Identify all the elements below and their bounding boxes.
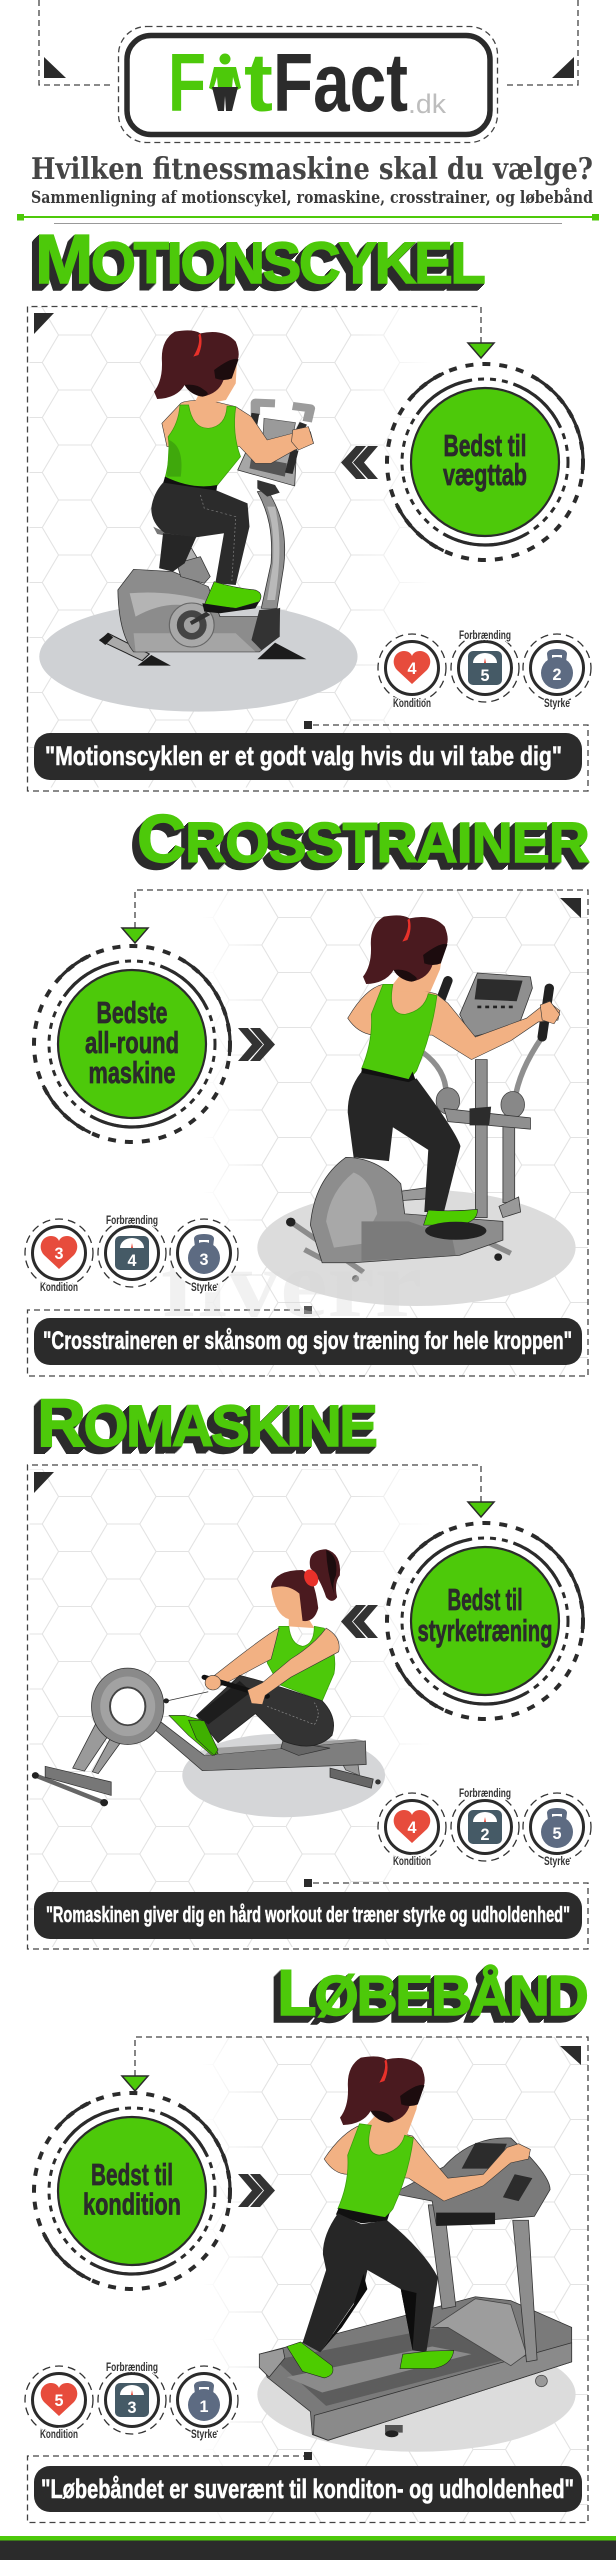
panel frame — [28, 2037, 588, 2522]
quote — [34, 2466, 582, 2512]
badge: best for: Bedst til — [444, 428, 526, 463]
stat: forbrænding — [98, 2360, 166, 2434]
heading: CROSSTRAINER — [137, 801, 589, 877]
corner arrow — [34, 1472, 54, 1493]
quote — [34, 1318, 582, 1365]
arrow to badge — [122, 928, 148, 943]
hex background — [30, 1466, 431, 1948]
logo — [118, 26, 498, 142]
logo: .dk — [408, 89, 447, 119]
stat: forbrænding: Forbrænding — [459, 1786, 511, 1800]
stat: kondition — [378, 1793, 446, 1868]
section: romaskine — [28, 1385, 591, 1949]
badge: best for: Bedst til — [448, 1582, 522, 1617]
logo: F — [168, 36, 206, 129]
stat: forbrænding: 4 — [128, 1251, 137, 1270]
illustration: woman on rowing machine — [32, 1549, 385, 1817]
hex background — [30, 307, 431, 792]
badge: best for: vægttab — [443, 457, 527, 492]
hex background — [203, 890, 588, 1376]
corner arrow — [560, 2046, 581, 2065]
stat: forbrænding: 2 — [480, 1825, 490, 1844]
corner arrow right — [552, 57, 574, 78]
panel frame — [28, 306, 588, 791]
watermark: fiverr — [162, 1230, 422, 1337]
stat: styrke: Styrke — [544, 1854, 570, 1868]
illustration: woman on treadmill — [257, 2071, 576, 2452]
stat: kondition: 5 — [54, 2391, 64, 2410]
stat: kondition: Kondition — [40, 1280, 78, 1294]
corner arrow — [560, 898, 581, 918]
stat: forbrænding: 3 — [128, 2398, 136, 2417]
corner arrow left — [44, 57, 66, 78]
stat: styrke — [523, 1793, 591, 1868]
logo: Fact — [273, 36, 408, 129]
arrow to badge — [468, 1502, 494, 1517]
icon: person in logo — [209, 54, 241, 111]
panel frame — [28, 1465, 588, 1949]
hair — [154, 330, 239, 399]
stat: styrke: 2 — [552, 665, 562, 684]
stat: kondition: Kondition — [40, 2427, 78, 2441]
stat: forbrænding — [451, 1786, 519, 1861]
stat: styrke — [170, 1219, 238, 1294]
stat: kondition: 4 — [408, 659, 417, 678]
stat: kondition: Kondition — [393, 696, 431, 710]
heading: ROMASKINE — [37, 1385, 376, 1461]
hair — [340, 2056, 425, 2125]
stat: forbrænding — [98, 1213, 166, 1287]
hex background — [203, 2037, 588, 2522]
illustration: woman on crosstrainer — [257, 932, 576, 1306]
badge: best for — [387, 1523, 583, 1719]
badge: best for — [387, 364, 583, 560]
illustration: woman on exercise bike — [39, 347, 358, 712]
logo: t — [244, 36, 273, 129]
stat: styrke: 5 — [552, 1824, 562, 1843]
hair — [363, 915, 448, 984]
badge: best for: all-round — [85, 1025, 179, 1060]
arrow to badge — [468, 343, 494, 358]
stat: styrke — [170, 2366, 238, 2441]
stat: forbrænding: Forbrænding — [106, 2360, 158, 2374]
badge: best for: Bedste — [96, 995, 168, 1030]
stat: forbrænding: Forbrænding — [106, 1213, 158, 1227]
corner arrow — [34, 313, 54, 334]
quote — [34, 733, 582, 780]
heading: MOTIONSCYKEL — [35, 220, 484, 298]
stat: styrke: 3 — [200, 1250, 208, 1269]
stat: styrke — [523, 634, 591, 710]
square marker — [304, 721, 312, 729]
badge: best for — [34, 2093, 230, 2289]
stat: kondition — [378, 634, 446, 710]
section: crosstrainer — [25, 801, 589, 1376]
header frame — [39, 0, 578, 85]
footer bar — [0, 2536, 616, 2560]
arrow to badge — [122, 2076, 148, 2091]
section: løbebånd — [25, 1956, 588, 2522]
stat: styrke: 1 — [200, 2397, 208, 2416]
stat: kondition: 3 — [54, 1244, 64, 1263]
square marker — [304, 1306, 312, 1314]
badge: best for: Bedst til — [91, 2157, 173, 2192]
chevrons — [238, 1028, 275, 1061]
badge: best for: maskine — [88, 1055, 176, 1090]
stat: kondition: Kondition — [393, 1854, 431, 1868]
stat: forbrænding: Forbrænding — [459, 628, 511, 642]
chevrons — [341, 446, 378, 479]
badge: best for: kondition — [83, 2186, 181, 2222]
quote — [34, 1892, 582, 1939]
badge: best for — [34, 946, 230, 1142]
chevrons — [238, 2174, 275, 2207]
stat: forbrænding: 5 — [480, 666, 490, 685]
panel frame — [28, 890, 588, 1376]
stat: forbrænding — [451, 628, 519, 702]
stat: styrke: Styrke — [544, 696, 570, 710]
heading: LØBEBÅND — [277, 1956, 587, 2029]
section: motionscykel — [28, 220, 591, 792]
stat: kondition: 4 — [408, 1818, 417, 1837]
stat: kondition — [25, 1219, 93, 1294]
square marker — [304, 2452, 312, 2460]
square marker — [304, 1879, 312, 1887]
divider lines — [17, 214, 599, 224]
stat: kondition — [25, 2366, 93, 2441]
chevrons — [341, 1605, 378, 1638]
stat: styrke: Styrke — [191, 2427, 217, 2441]
stat: styrke: Styrke — [191, 1280, 217, 1294]
